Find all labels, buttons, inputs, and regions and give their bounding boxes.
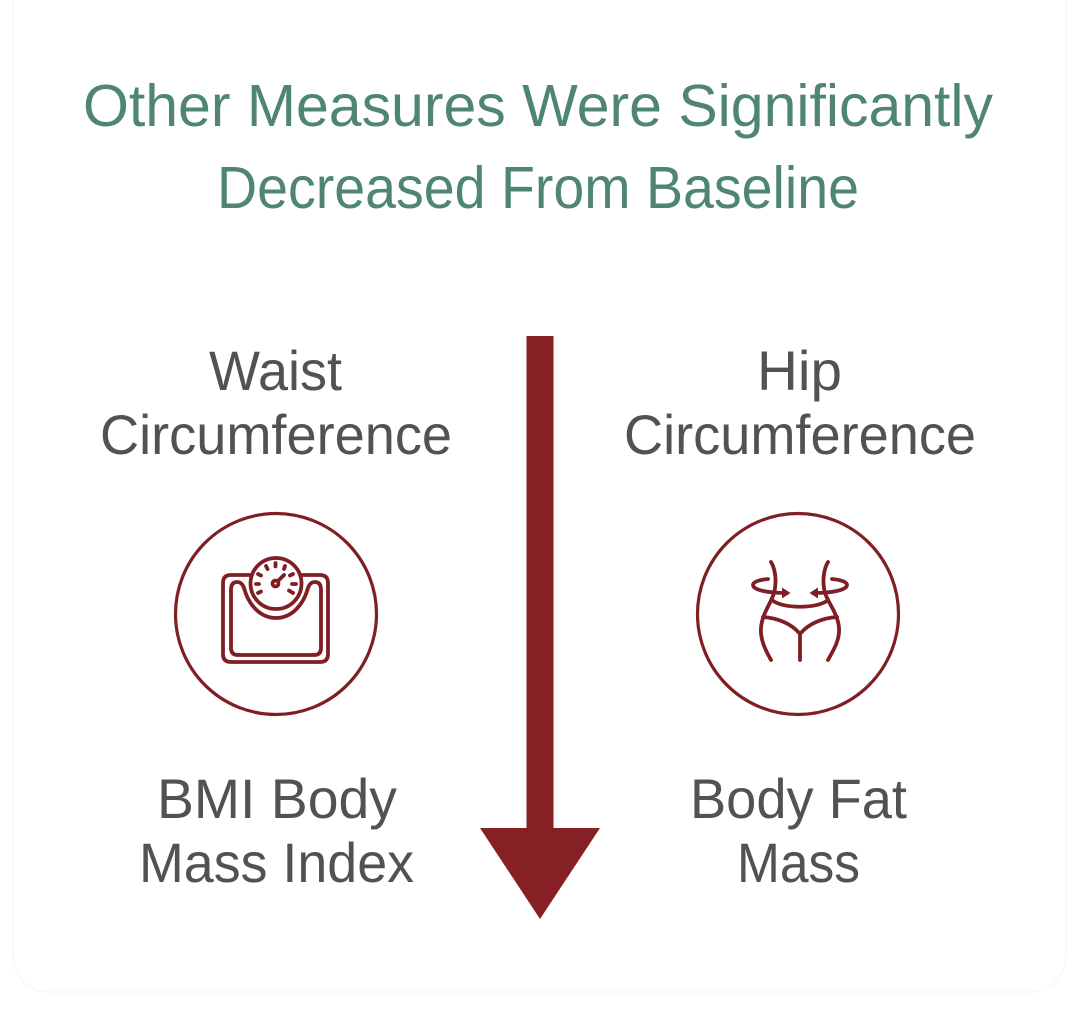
arrow: downward — [480, 336, 600, 919]
arrowhead: right — [810, 588, 818, 598]
label: waist circumference: Waist — [209, 339, 342, 402]
label: BMI body mass index: Mass Index — [139, 831, 414, 894]
label: body fat mass: Mass — [737, 831, 860, 894]
label: BMI body mass index — [139, 767, 414, 894]
title: Decreased From Baseline — [217, 155, 859, 221]
label: body fat mass — [690, 767, 907, 894]
label: hip circumference — [624, 339, 976, 466]
title: Other Measures Were Significantly — [83, 73, 993, 139]
title — [83, 73, 993, 221]
label: waist circumference — [100, 339, 452, 466]
icon: weighing scale — [176, 514, 376, 714]
label: hip circumference: Hip — [757, 339, 842, 402]
label: waist circumference: Circumference — [100, 403, 452, 466]
label: hip circumference: Circumference — [624, 403, 976, 466]
arrowhead: left — [782, 588, 790, 598]
label: BMI body mass index: BMI Body — [157, 767, 397, 830]
label: body fat mass: Body Fat — [690, 767, 907, 830]
icon: waist measurement — [698, 514, 898, 714]
